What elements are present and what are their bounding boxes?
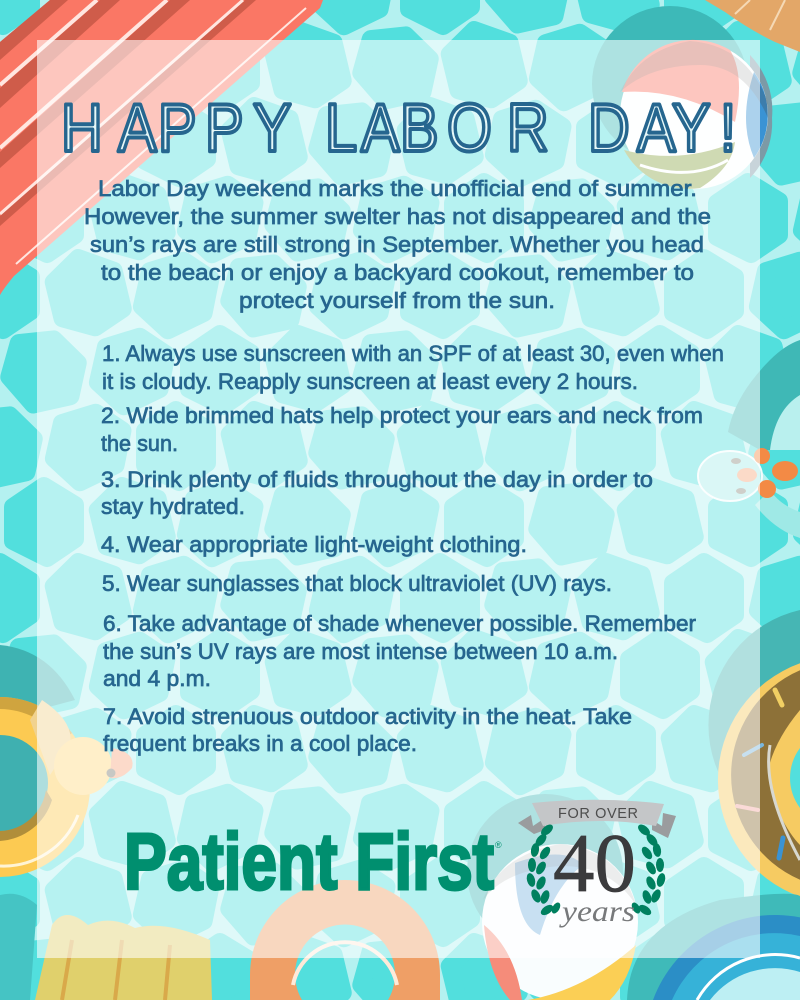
decoration: bottom beach ball <box>467 794 638 1000</box>
intro paragraph: protect yourself from the sun. <box>239 288 555 313</box>
decoration: donut float right side <box>708 610 800 897</box>
intro paragraph: Labor Day weekend marks the unofficial end of summer. <box>98 176 697 201</box>
tip 3: 3. Drink plenty of fluids throughout the day in order to <box>101 467 653 492</box>
decoration: bottom yellow float <box>35 915 212 1000</box>
intro paragraph: However, the summer swelter has not disappeared and the <box>84 204 711 229</box>
tip 7 <box>103 704 632 756</box>
decoration: bottom blue ring <box>627 894 800 1000</box>
laurel wreath <box>525 822 667 917</box>
title: LABOR <box>325 91 549 166</box>
tip 3: stay hydrated. <box>101 494 245 519</box>
tip 2: 2. Wide brimmed hats help protect your ears and neck from <box>101 403 703 428</box>
tip 6: the sun’s UV rays are most intense between 10 a.m. <box>103 639 618 664</box>
intro paragraph: to the beach or enjoy a backyard cookout, remember to <box>101 260 694 285</box>
tip 3 <box>101 467 653 519</box>
tip 7: frequent breaks in a cool place. <box>103 731 417 756</box>
tip 2 <box>101 403 703 456</box>
tip 6 <box>103 611 696 691</box>
ribbon <box>518 800 676 838</box>
logo: Patient First: ® <box>495 840 502 850</box>
number 40: 40 <box>553 817 636 910</box>
years: years <box>559 895 635 928</box>
tip 2: the sun. <box>101 431 178 456</box>
intro paragraph: sun’s rays are still strong in September. Whether you head <box>90 232 704 257</box>
tip 1: it is cloudy. Reapply sunscreen at least every 2 hours. <box>102 369 638 394</box>
decoration: duck ring <box>0 645 133 1000</box>
decoration: orange float top right <box>705 0 800 52</box>
intro paragraph <box>84 176 711 313</box>
logo: Patient First: Patient First <box>124 817 494 906</box>
tip 4: 4. Wear appropriate light-weight clothing. <box>101 532 527 557</box>
decoration: bottom orange ring <box>250 880 440 1000</box>
ribbon: FOR OVER <box>558 806 638 822</box>
tip 5: 5. Wear sunglasses that block ultraviolet (UV) rays. <box>102 571 612 596</box>
tip 6: 6. Take advantage of shade whenever possible. Remember <box>103 611 696 636</box>
decoration: top beach ball <box>592 6 772 189</box>
decoration: red pool float <box>0 0 323 295</box>
decoration: turtle float right side <box>698 340 800 538</box>
badge: for over 40 years <box>518 800 676 928</box>
title <box>61 91 736 166</box>
tip 1: 1. Always use sunscreen with an SPF of at least 30, even when <box>102 341 724 366</box>
tip 6: and 4 p.m. <box>103 666 211 691</box>
tip 7: 7. Avoid strenuous outdoor activity in the heat. Take <box>103 704 632 729</box>
title: DAY! <box>588 91 736 166</box>
title: HAPPY <box>61 91 292 166</box>
tip 1 <box>102 341 724 394</box>
